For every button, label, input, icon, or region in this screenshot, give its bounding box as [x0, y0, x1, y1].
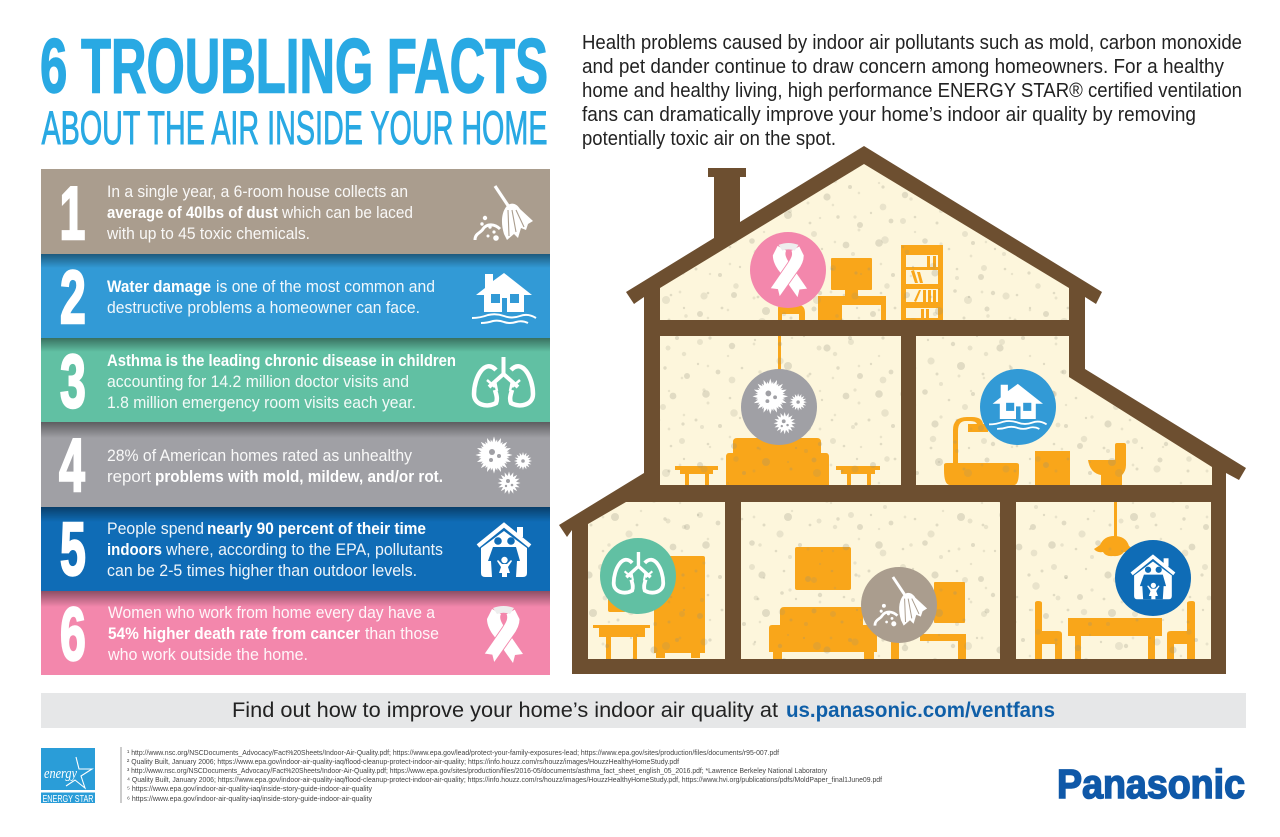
panel: fact 1 dust: In a single year, a 6-room house collects an [107, 183, 408, 201]
house frame [559, 146, 1246, 674]
attic furniture [778, 245, 943, 320]
panel: fact 5 indoors: can be 2-5 times higher than outdoor levels. [107, 562, 417, 580]
panel: fact 1 dust: average of 40lbs of dust [107, 204, 278, 222]
panel: fact 3 asthma [41, 338, 550, 424]
panel: fact 1 dust: 1 [60, 173, 85, 256]
panel: fact 4 mold: problems with mold, mildew, and/or rot. [155, 468, 443, 486]
panel: fact 4 mold: 4 [59, 425, 85, 508]
panel: fact 6 cancer: 6 [60, 594, 86, 677]
energy star logo: energy [44, 766, 77, 782]
panel: fact 6 cancer [41, 591, 550, 677]
call to action banner: us.panasonic.com/ventfans [786, 698, 1055, 722]
call to action banner [41, 693, 1246, 728]
dining room furniture [1035, 502, 1195, 659]
panel: fact 1 dust [41, 169, 550, 256]
icon circle: family [1115, 540, 1191, 616]
panel: fact 2 water damage: Water damage [107, 278, 211, 296]
panel: fact 3 asthma: 3 [60, 341, 86, 424]
icon circle: water damage [980, 369, 1056, 445]
panel: fact 6 cancer: 54% higher death rate from cancer [108, 625, 361, 643]
intro paragraph: potentially toxic air on the spot. [582, 128, 836, 150]
call to action banner: Find out how to improve your home’s indoor air quality at [232, 698, 778, 722]
wall speckle texture [588, 164, 1212, 659]
icon circle: lungs [600, 538, 676, 614]
panel: fact 1 dust: with up to 45 toxic chemicals. [106, 225, 310, 243]
panel: fact 2 water damage: 2 [60, 257, 86, 340]
house illustration [559, 146, 1246, 674]
intro paragraph: fans can dramatically improve your home’s indoor air quality by removing [582, 104, 1196, 126]
footnotes: ⁴ Quality Built, January 2006; https://www.epa.gov/indoor-air-quality-iaq/flood-cleanup-protect-indoor-air-quality; https://info.houzz.com/rs/houzz/images/HouzzHealthyHomeStudy.pdf, https://www.hvi.org/publications/pdfs/MoldPaper_final1June09.pdf [127, 775, 882, 784]
footnotes: ⁶ https://www.epa.gov/indoor-air-quality-iaq/inside-story-guide-indoor-air-quality [127, 794, 372, 803]
panel: fact 3 asthma: Asthma is the leading chronic disease in children [107, 352, 456, 370]
panel: fact 5 indoors: indoors [107, 541, 162, 559]
footnotes [120, 747, 882, 803]
intro paragraph: home and healthy living, high performance ENERGY STAR® certified ventilation [582, 80, 1242, 102]
icon circle: mold [741, 369, 817, 445]
panel: fact 6 cancer: Women who work from home every day have a [108, 604, 436, 622]
intro paragraph: and pet dander continue to draw concern among homeowners. For a healthy [582, 56, 1224, 78]
rooms [588, 164, 1212, 659]
panel: fact 1 dust: which can be laced [281, 204, 413, 222]
panel: fact 5 indoors [41, 507, 550, 592]
footnotes: ³ http://www.nsc.org/NSCDocuments_Advocacy/Fact%20Sheets/Indoor-Air-Quality.pdf; https://www.epa.gov/sites/production/files/2016-05/documents/asthma_fact_sheet_english_05_2016.pdf; *Lawrence Berkeley National Laboratory [127, 766, 827, 775]
panel: fact 5 indoors: where, according to the EPA, pollutants [165, 541, 443, 559]
footnotes: ¹ http://www.nsc.org/NSCDocuments_Advocacy/Fact%20Sheets/Indoor-Air-Quality.pdf; https://www.epa.gov/lead/protect-your-family-exposures-lead; https://www.epa.gov/sites/production/files/documents/r95-007.pdf [127, 748, 779, 757]
panel: fact 2 water damage [41, 254, 550, 340]
panel: fact 4 mold: 28% of American homes rated as unhealthy [107, 447, 413, 465]
panel: fact 2 water damage: destructive problems a homeowner can face. [107, 299, 420, 317]
panel: fact 4 mold [41, 422, 550, 508]
panel: fact 3 asthma: 1.8 million emergency room visits each year. [107, 394, 416, 412]
icon: ribbon [484, 606, 523, 663]
panel: fact 4 mold: report [107, 468, 151, 486]
panel: fact 6 cancer: than those [365, 625, 439, 643]
bathroom fixtures [944, 417, 1126, 485]
intro paragraph: Health problems caused by indoor air pollutants such as mold, carbon monoxide [582, 32, 1242, 54]
subtitle: ABOUT THE AIR INSIDE YOUR HOME [42, 101, 548, 154]
icon circle: ribbon [750, 232, 826, 308]
title: 6 TROUBLING FACTS [40, 24, 548, 110]
intro paragraph [582, 32, 1242, 150]
panel: fact 5 indoors: 5 [60, 509, 86, 592]
icon: family in house [478, 525, 530, 577]
title [40, 24, 548, 154]
icon: lungs [474, 357, 533, 405]
panel: fact 6 cancer: who work outside the home. [107, 646, 308, 664]
panasonic logo: Panasonic [1057, 761, 1245, 807]
family room furniture [769, 547, 966, 659]
icon: mold spores [475, 436, 532, 494]
panel: fact 5 indoors: nearly 90 percent of their time [207, 520, 426, 538]
icon circle: broom [861, 567, 937, 643]
panel: fact 3 asthma: accounting for 14.2 million doctor visits and [107, 373, 409, 391]
energy star logo [41, 748, 95, 805]
bedroom furniture [593, 556, 705, 659]
energy star logo: ENERGY STAR [42, 794, 94, 805]
panel: fact 2 water damage: is one of the most common and [216, 278, 435, 296]
icon: flooded house [472, 273, 536, 323]
footnotes: ² Quality Built, January 2006; https://www.epa.gov/indoor-air-quality-iaq/flood-cleanup-protect-indoor-air-quality; https://info.houzz.com/rs/houzz/images/HouzzHealthyHomeStudy.pdf [127, 757, 679, 766]
footnotes: ⁵ https://www.epa.gov/indoor-air-quality-iaq/inside-story-guide-indoor-air-quality [127, 784, 372, 793]
living room furniture [675, 336, 880, 485]
icon: broom [475, 186, 533, 241]
panel: fact 5 indoors: People spend [107, 520, 204, 538]
